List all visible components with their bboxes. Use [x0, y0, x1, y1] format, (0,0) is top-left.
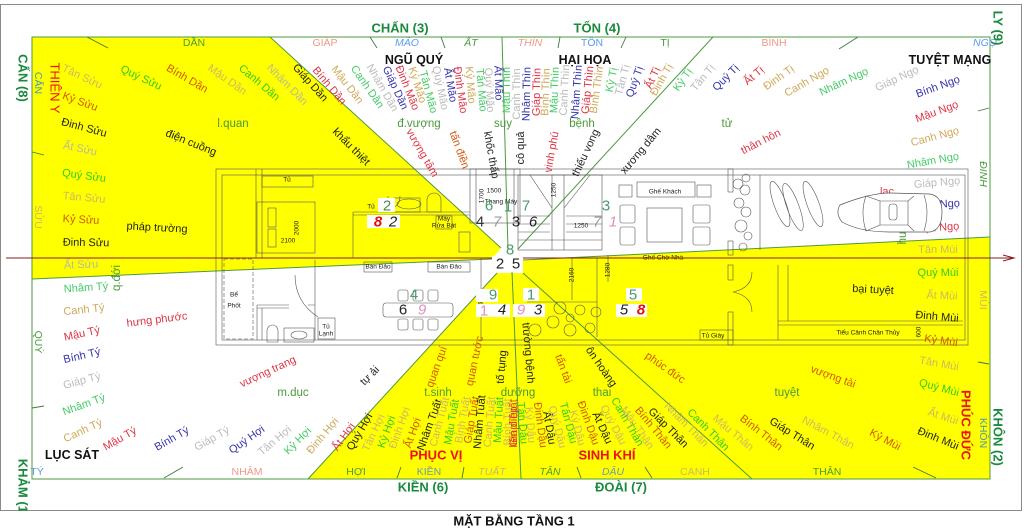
sector labels: CẤN	[32, 72, 45, 94]
plan labels: 2750	[478, 297, 484, 312]
ring: outer stem-branch names: Tân Hợi	[360, 413, 388, 453]
direction names: LỤC SÁT	[45, 447, 99, 462]
ring: middle names: quan quí	[424, 345, 450, 389]
ring: middle names: cô quả	[515, 131, 527, 165]
ring: middle names: ôn hoàng	[583, 345, 619, 389]
ring: middle names: quan tước	[464, 334, 486, 387]
ring: outer stem-branch names: Canh Dần	[236, 62, 282, 104]
building walls	[216, 169, 968, 345]
ring: outer stem-branch names: Ất Mùi	[926, 406, 960, 428]
ring: outer stem-branch names: Quý Dậu	[598, 403, 628, 447]
ring: outer stem-branch names: Mậu Tuất	[442, 398, 462, 446]
plan labels: Lạnh	[319, 330, 334, 338]
ring: outer stem-branch names: Tân Tị	[688, 62, 718, 94]
ring: outer stem-branch names: Giáp Tý	[192, 424, 232, 454]
ring: outer stem-branch names: Giáp Thìn	[580, 65, 596, 115]
ring: outer stem-branch names: Kỷ Dậu	[522, 407, 538, 443]
flying star numbers: 9	[418, 302, 427, 318]
plan labels: 600	[916, 326, 922, 337]
ring: middle names: thiếu vong	[570, 127, 602, 179]
ring: outer stem-branch names: Mậu Ngọ	[914, 220, 960, 236]
plan labels	[227, 176, 922, 340]
ring: life stages: thai	[593, 387, 611, 399]
sector labels: BÍNH	[761, 36, 787, 49]
ring: outer stem-branch names: Ất Dậu	[540, 410, 559, 446]
sector labels: TÂN	[540, 465, 561, 478]
ring: life stages: dưỡng	[501, 387, 535, 399]
ring: outer stem-branch names: Giáp Dần	[290, 62, 330, 104]
ring: outer stem-branch names: Canh Tuất	[428, 396, 452, 448]
flying star numbers: 3	[534, 302, 543, 318]
ring: outer stem-branch names: Canh Thân	[608, 396, 646, 448]
ring: life stages: q.đới	[111, 265, 123, 291]
ring: outer stem-branch names: Giáp Thân	[767, 415, 817, 453]
ring: middle names: vinh phú	[542, 130, 562, 174]
plan labels: Tủ Giày	[702, 332, 725, 340]
flying star numbers: 3	[512, 214, 520, 230]
ring: outer stem-branch names: Giáp Tuất	[508, 399, 520, 447]
plan labels: Tiểu Cảnh Chân Thủy	[836, 328, 900, 336]
ring: outer stem-branch names: Kỷ Mão	[462, 66, 478, 104]
sector labels: SỬU	[32, 205, 45, 229]
ring: outer stem-branch names: Kỷ Hợi	[376, 414, 398, 450]
ring: outer stem-branch names: Quý Hợi	[227, 423, 267, 457]
flying star numbers: 9	[489, 286, 497, 304]
sector labels: KHÔN	[977, 418, 990, 448]
ring: middle names: vượng tâm	[403, 127, 441, 179]
ring: outer stem-branch names: Ất Tị	[642, 65, 663, 91]
flying star numbers	[367, 198, 647, 320]
ring: outer stem-branch names: Canh Ngọ	[783, 64, 831, 100]
ring: outer stem-branch names: Bính Dần	[310, 65, 348, 107]
ring: outer stem-branch names: Nhâm Dần	[364, 62, 400, 114]
flying star numbers: 5	[620, 302, 629, 318]
ring: outer stem-branch names: Mậu Thìn	[548, 67, 562, 113]
sector labels: NHÂM	[232, 465, 262, 478]
flying star numbers: 7	[522, 198, 530, 214]
ring: outer stem-branch names: Kỷ Tị	[671, 66, 695, 94]
yellow sector: lower and right	[308, 237, 990, 479]
ring: outer stem-branch names: Nhâm Thân	[662, 401, 710, 449]
ring: outer stem-branch names: Canh Thân	[685, 407, 731, 453]
ring: life stages: t.sinh	[424, 387, 452, 399]
flying star numbers: 1	[527, 286, 535, 304]
ring: middle names: hưng phước	[126, 310, 189, 330]
ring: outer stem-branch names: Giáp Thìn	[531, 68, 543, 116]
ring: outer stem-branch names: Ất Mão	[491, 65, 506, 101]
sector labels: GIÁP	[312, 36, 338, 49]
trigram headings: LY (9)	[990, 11, 1006, 45]
sector labels: DẬU	[602, 465, 625, 478]
ring: outer stem-branch names: Đinh Sửu	[60, 116, 108, 140]
flying star numbers: 4	[476, 214, 484, 230]
ring: middle names: điện cuồng	[164, 127, 218, 159]
ring: life stages: suy	[494, 118, 512, 130]
ring: outer stem-branch names: Nhâm Thìn	[569, 65, 585, 119]
flying star numbers: 1	[609, 214, 617, 230]
ring: outer stem-branch names: Tân Dậu	[557, 401, 579, 445]
caption: MẶT BẰNG TẦNG 1	[453, 514, 575, 528]
ring: outer stem-branch names: Tân Mùi	[918, 355, 960, 373]
ring: outer stem-branch names: Kỷ Mùi	[924, 333, 958, 349]
ring: outer stem-branch names: Nhâm Tý	[63, 280, 109, 296]
ring: outer stem-branch names: Đinh Mão	[393, 64, 421, 112]
ring: middle names: khẩu thiệt	[330, 126, 372, 168]
ring: life stages: l.quan	[217, 118, 249, 130]
sector labels: TUẤT	[478, 465, 507, 478]
ring: outer stem-branch names: Tân Sửu	[62, 190, 106, 206]
sector labels: MÃO	[395, 36, 419, 49]
sector labels: KIỀN	[417, 465, 441, 478]
sector labels: TỐN	[581, 35, 603, 49]
direction names: SINH KHÍ	[578, 448, 636, 462]
ring: outer stem-branch names: Mậu Dần	[205, 62, 249, 98]
ring: outer stem-branch names: Bính Dần	[164, 62, 210, 96]
plan labels: Tủ	[283, 176, 291, 184]
ring: middle names	[126, 125, 895, 447]
ring: middle names: vượng tài	[809, 363, 857, 391]
ring: outer stem-branch names: Nhâm Ngọ	[818, 65, 870, 99]
ring: outer stem-branch names: Mậu Thìn	[501, 67, 513, 113]
sector labels: NGỌ	[973, 37, 997, 49]
ring: life stages: hu	[897, 232, 909, 244]
trigram headings: TỐN (4)	[574, 20, 620, 36]
flying star numbers: 4	[498, 302, 506, 318]
plan labels: Rửa Bát	[432, 222, 456, 230]
sector labels: ẤT	[463, 36, 479, 49]
plan labels: 1500	[487, 188, 502, 194]
ring: middle names: pháp trường	[126, 220, 188, 236]
ring: outer stem-branch names: Ất Sửu	[62, 139, 98, 158]
sector boundary lines	[32, 37, 990, 479]
ring: outer stem-branch names: Giáp Thân	[646, 406, 690, 450]
ring: outer stem-branch names: Quý Tị	[624, 65, 646, 99]
ring: outer stem-branch names: Đinh Dậu	[531, 401, 549, 449]
plan labels: 1280	[604, 262, 612, 277]
ring: outer stem-branch names: Kỷ Mùi	[867, 427, 903, 453]
sector labels: DẦN	[183, 36, 205, 49]
ring: middle names: tố tụng	[495, 350, 509, 384]
ring: life stages: tử	[722, 118, 733, 130]
ring: outer stem-branch names: Bính Tý	[153, 424, 192, 454]
ring: outer stem-branch names: Ất Sửu	[64, 257, 98, 272]
ring: outer stem-branch names: Canh Thìn	[511, 68, 523, 120]
ring: outer stem-branch names: Nhâm Tuất	[472, 395, 488, 449]
ring: outer stem-branch names: Đinh Hợi	[304, 416, 342, 456]
ring: outer stem-branch names: Quý Sửu	[61, 167, 107, 185]
flying star numbers: 6	[399, 302, 407, 318]
ring: outer stem-branch names: Canh Tuất	[482, 396, 498, 448]
trigram headings: KIỀN (6)	[398, 480, 448, 494]
plan labels: Tủ	[367, 202, 375, 210]
flying star numbers: 1	[480, 302, 488, 320]
plan labels: Bàn Đảo	[436, 264, 462, 270]
ring: outer stem-branch names: Nhâm Thân	[800, 414, 856, 452]
sector labels: MÙI	[977, 290, 990, 310]
motorbikes	[766, 179, 827, 233]
ring: outer stem-branch names: Nhâm Tý	[61, 392, 107, 418]
ring: outer stem-branch names: Quý Tị	[710, 62, 742, 94]
direction names: THIÊN Y	[48, 62, 62, 114]
plan labels: 1700	[478, 188, 486, 203]
ring: outer stem-branch names: Đinh Tị	[761, 63, 797, 93]
plan labels: Bể	[230, 290, 238, 298]
ring: outer stem-branch names: Tân Mão	[417, 69, 439, 115]
ring: outer stem-branch names: Quý Mùi	[918, 377, 960, 399]
ring: life stages: bệnh	[569, 118, 595, 130]
trigram headings: KHÔN (2)	[990, 408, 1006, 466]
ring: outer stem-branch names: Bính Tuất	[502, 398, 514, 446]
ring: outer stem-branch names: Mậu Tý	[101, 424, 139, 453]
flying star numbers: 4	[410, 286, 418, 304]
ring: outer stem-branch names: Canh Thìn	[558, 64, 572, 116]
direction names	[45, 52, 991, 462]
axis arrow	[6, 255, 1014, 261]
plan labels: Tủ	[322, 322, 330, 330]
direction names: HẠI HỌA	[559, 53, 611, 67]
ring: middle names: lạc	[880, 186, 895, 198]
floor plan	[216, 169, 968, 345]
ring: life stages: đ.vượng	[397, 118, 441, 130]
flying star numbers: 9	[517, 302, 526, 318]
ring: life stages: tuyệt	[775, 387, 800, 399]
sector labels: THÌN	[518, 36, 543, 49]
direction names: PHỤC VỊ	[410, 448, 462, 462]
ring: outer stem-branch names: Ất Hợi	[401, 416, 424, 450]
ring: outer stem-branch names	[60, 62, 962, 458]
ring: outer stem-branch names: Bính Thìn	[588, 66, 606, 114]
sector labels	[30, 35, 997, 478]
ring: middle names: xương dâm	[618, 125, 664, 177]
white cover below frame for clipped label	[5, 511, 45, 530]
ring: outer stem-branch names: Nhâm Thìn	[521, 67, 533, 121]
ring: outer stem-branch names: Kỷ Mão	[406, 65, 428, 105]
ring: outer stem-branch names: Mậu Thân	[618, 404, 656, 452]
plan labels: 2100	[281, 238, 296, 244]
trigram headings: CHẤN (3)	[371, 20, 429, 36]
ring: outer stem-branch names: Ất Mùi	[926, 288, 958, 303]
ring: outer stem-branch names: Bính Tý	[62, 346, 102, 366]
ring: outer stem-branch names: Canh Tý	[63, 302, 106, 318]
direction names: TUYỆT MẠNG	[909, 52, 991, 67]
ring: outer stem-branch names: Tân Tị	[613, 63, 633, 97]
ring: outer stem-branch names: Đinh Sửu	[63, 237, 109, 249]
sector labels: QUÝ	[32, 331, 45, 353]
ring: outer stem-branch names: Nhâm Dần	[264, 62, 310, 108]
flying star numbers: 8	[374, 214, 383, 230]
ring: outer stem-branch names: Đinh Hợi	[387, 406, 413, 450]
ring: middle names: bại tuyệt	[852, 283, 894, 297]
plan labels: Ghế Chờ Nhà	[643, 252, 684, 262]
flying star numbers: 5	[512, 256, 520, 272]
ring: outer stem-branch names: Đinh Mùi	[916, 425, 960, 453]
ring: outer stem-branch names: Nhâm Tuất	[415, 398, 445, 452]
ring: outer stem-branch names: Mậu Ngọ	[914, 99, 960, 125]
sector labels: TỊ	[660, 37, 670, 49]
ring: outer stem-branch names: Bính Ngọ	[914, 197, 960, 213]
ring: middle names: khốc thấp	[481, 130, 501, 180]
sector labels: THÂN	[813, 465, 841, 478]
ring: outer stem-branch names: Tân Sửu	[60, 63, 104, 91]
flying star numbers: 1	[504, 198, 512, 216]
ring: outer stem-branch names: Kỷ Dậu	[567, 409, 587, 447]
flying star numbers: 2	[383, 198, 391, 214]
ring: outer stem-branch names: Mậu Tý	[63, 324, 102, 344]
ring: outer stem-branch names: Tân Mão	[473, 68, 489, 112]
ring: outer stem-branch names: Bính Thân	[632, 405, 674, 451]
plan labels: 2000	[294, 220, 300, 235]
ring: middle names: tấn điền	[447, 130, 471, 170]
ring: outer stem-branch names: Đinh Mão	[451, 66, 469, 114]
ring: outer stem-branch names: Đinh Mùi	[915, 309, 959, 325]
plants	[529, 174, 752, 336]
plan labels: Thang Máy	[485, 198, 518, 206]
flying star numbers: 7	[493, 214, 502, 230]
ring: outer stem-branch names: Đinh Tị	[648, 62, 676, 98]
plan labels: Phốt	[227, 300, 241, 310]
direction names: PHÚC ĐỨC	[958, 390, 974, 461]
sector labels: TÝ	[30, 465, 44, 478]
flying star numbers: 2	[496, 256, 504, 272]
ring: outer stem-branch names: Tân Mùi	[918, 244, 958, 256]
ring: outer stem-branch names: Canh Tý	[62, 417, 105, 445]
plan labels: Ghế Khách	[649, 186, 682, 196]
yellow sector: upper left	[32, 37, 501, 279]
ring: outer stem-branch names: Giáp Ngọ	[873, 64, 921, 94]
flying star numbers: 5	[629, 286, 637, 304]
ring: outer stem-branch names: Kỷ Sửu	[61, 90, 99, 114]
ring: outer stem-branch names: Quý Mão	[482, 67, 496, 113]
ring: outer stem-branch names: Ất Mão	[441, 67, 460, 103]
ring: outer stem-branch names: Ất Dậu	[589, 410, 615, 446]
ring: outer stem-branch names: Quý Dậu	[546, 404, 568, 450]
ring: life stages	[111, 118, 909, 399]
ring: outer stem-branch names: Kỷ Hợi	[282, 425, 314, 457]
ring: outer stem-branch names: Tân Dậu	[514, 401, 530, 445]
ring: outer stem-branch names: Bính Ngọ	[914, 74, 962, 100]
plan labels: Bàn Đảo	[365, 264, 391, 270]
ring: outer stem-branch names: Mậu Dần	[329, 64, 365, 106]
trigram headings: ĐOÀI (7)	[595, 480, 647, 494]
ring: outer stem-branch names: Ất Hợi	[329, 420, 358, 453]
trigram headings: CẤN (8)	[16, 54, 30, 102]
flying star numbers: 8	[637, 302, 646, 318]
ring: middle names: phúc đức	[643, 350, 688, 386]
ring: middle names: liền điệp	[508, 407, 520, 447]
ring: life stages: m.dục	[277, 387, 309, 399]
ring: outer stem-branch names: Giáp Ngọ	[913, 175, 961, 191]
flying star numbers: 3	[602, 198, 610, 214]
ring: outer stem-branch names: Canh Dần	[348, 63, 386, 111]
ring: outer stem-branch names: Kỷ Tị	[604, 67, 620, 93]
ring: outer stem-branch names: Kỷ Sửu	[62, 213, 100, 227]
ring: outer stem-branch names: Giáp Tý	[62, 370, 103, 392]
ring: middle names: thân hôn	[739, 127, 783, 157]
flying star numbers: 8	[506, 242, 514, 258]
ring: outer stem-branch names: Quý Hợi	[345, 411, 375, 453]
ring: outer stem-branch names: Quý Mão	[429, 65, 451, 111]
ring: outer stem-branch names: Tân Hợi	[256, 424, 294, 458]
ring: middle names: trường bệnh	[519, 322, 537, 384]
ring: outer stem-branch names: Mậu Tuất	[492, 397, 506, 443]
ring: outer stem-branch names: Quý Sửu	[118, 63, 164, 93]
direction names: NGŨ QUÝ	[385, 52, 444, 67]
plan labels: 1250	[550, 182, 558, 197]
sector labels: CANH	[680, 466, 710, 478]
flying star numbers: 7	[593, 214, 602, 230]
trigram headings: KHẢM (1)	[16, 459, 30, 517]
flying star numbers: 6	[529, 214, 538, 230]
ring: outer stem-branch names: Đinh Dậu	[575, 399, 601, 447]
plan labels: 2160	[568, 267, 576, 282]
flying star numbers: 6	[485, 198, 493, 214]
plan labels: 1250	[574, 222, 589, 230]
car	[838, 193, 942, 232]
plan labels: Máy	[438, 216, 451, 222]
ring: middle names: vượng trang	[238, 354, 298, 390]
ring: outer stem-branch names: Canh Ngọ	[910, 125, 960, 149]
ring: middle names: tự ải	[358, 364, 382, 388]
ring: outer stem-branch names: Quý Mùi	[918, 267, 958, 279]
sector labels: HỢI	[346, 466, 366, 478]
ring: outer stem-branch names: Bính Thân	[737, 413, 785, 453]
flying star numbers: 2	[388, 214, 398, 230]
ring: outer stem-branch names: Bính Tuất	[453, 396, 473, 444]
sector labels: ĐINH	[977, 161, 989, 187]
ring: outer stem-branch names: Nhâm Ngọ	[906, 151, 960, 171]
ring: outer stem-branch names: Ất Tị	[741, 63, 766, 88]
ring: outer stem-branch names: Giáp Tuất	[462, 395, 482, 445]
ring: outer stem-branch names: Mậu Thân	[710, 413, 756, 453]
ring: middle names: tấn tài	[552, 353, 574, 385]
ring: outer stem-branch names: Bính Thìn	[539, 68, 553, 116]
ring: outer stem-branch names: Giáp Dần	[380, 64, 410, 112]
